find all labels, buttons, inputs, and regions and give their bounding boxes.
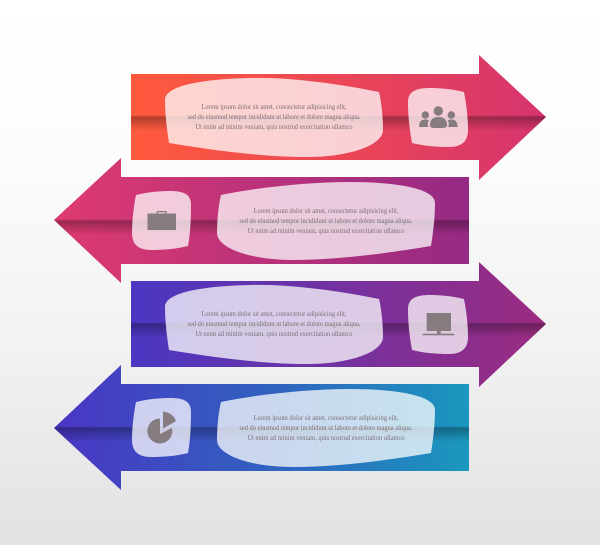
fold shadow xyxy=(131,115,546,180)
panel: arrow 2 (left, magenta) xyxy=(54,158,469,283)
text block: sed do eiusmod tempor incididunt ut labore et dolore magna aliqua. xyxy=(240,423,413,432)
panel: arrow 1 (right, red) xyxy=(131,55,546,180)
fold shadow xyxy=(54,426,469,490)
text block: Lorem ipsum dolor sit amet, consectetur adipisicing elit, xyxy=(202,102,347,111)
icon: pie chart xyxy=(147,412,176,443)
icon bubble xyxy=(132,191,191,250)
text block: Ut enim ad minim veniam, quis nostrud exercitation ullamco xyxy=(196,329,353,338)
text block: sed do eiusmod tempor incididunt ut labore et dolore magna aliqua. xyxy=(188,319,361,328)
text block: Ut enim ad minim veniam, quis nostrud exercitation ullamco xyxy=(248,226,405,235)
icon bubble xyxy=(132,398,191,457)
text block: Lorem ipsum dolor sit amet, consectetur adipisicing elit, xyxy=(254,413,399,422)
text block: Ut enim ad minim veniam, quis nostrud exercitation ullamco xyxy=(196,122,353,131)
text block: sed do eiusmod tempor incididunt ut labore et dolore magna aliqua. xyxy=(240,216,413,225)
panel: arrow 3 (right, violet) xyxy=(131,262,546,387)
icon: monitor xyxy=(423,313,454,335)
text bubble xyxy=(217,389,435,467)
arrow body xyxy=(131,55,546,180)
icon bubble xyxy=(408,295,468,354)
icon: people xyxy=(419,106,458,128)
text block: Ut enim ad minim veniam, quis nostrud exercitation ullamco xyxy=(248,433,405,442)
arrow body xyxy=(54,365,469,490)
icon bubble xyxy=(408,88,468,147)
panel: arrow 4 (left, blue) xyxy=(54,365,469,490)
text block xyxy=(240,413,413,442)
text bubble xyxy=(165,285,383,364)
text block: sed do eiusmod tempor incididunt ut labore et dolore magna aliqua. xyxy=(188,112,361,121)
text block xyxy=(188,309,361,338)
arrow body xyxy=(54,158,469,283)
icon: briefcase xyxy=(148,211,176,230)
text bubble xyxy=(217,182,435,260)
arrow body xyxy=(131,262,546,387)
fold shadow xyxy=(131,322,546,387)
text block xyxy=(188,102,361,131)
text block: Lorem ipsum dolor sit amet, consectetur adipisicing elit, xyxy=(202,309,347,318)
fold shadow xyxy=(54,219,469,283)
text block xyxy=(240,206,413,235)
text block: Lorem ipsum dolor sit amet, consectetur adipisicing elit, xyxy=(254,206,399,215)
text bubble xyxy=(165,78,383,157)
